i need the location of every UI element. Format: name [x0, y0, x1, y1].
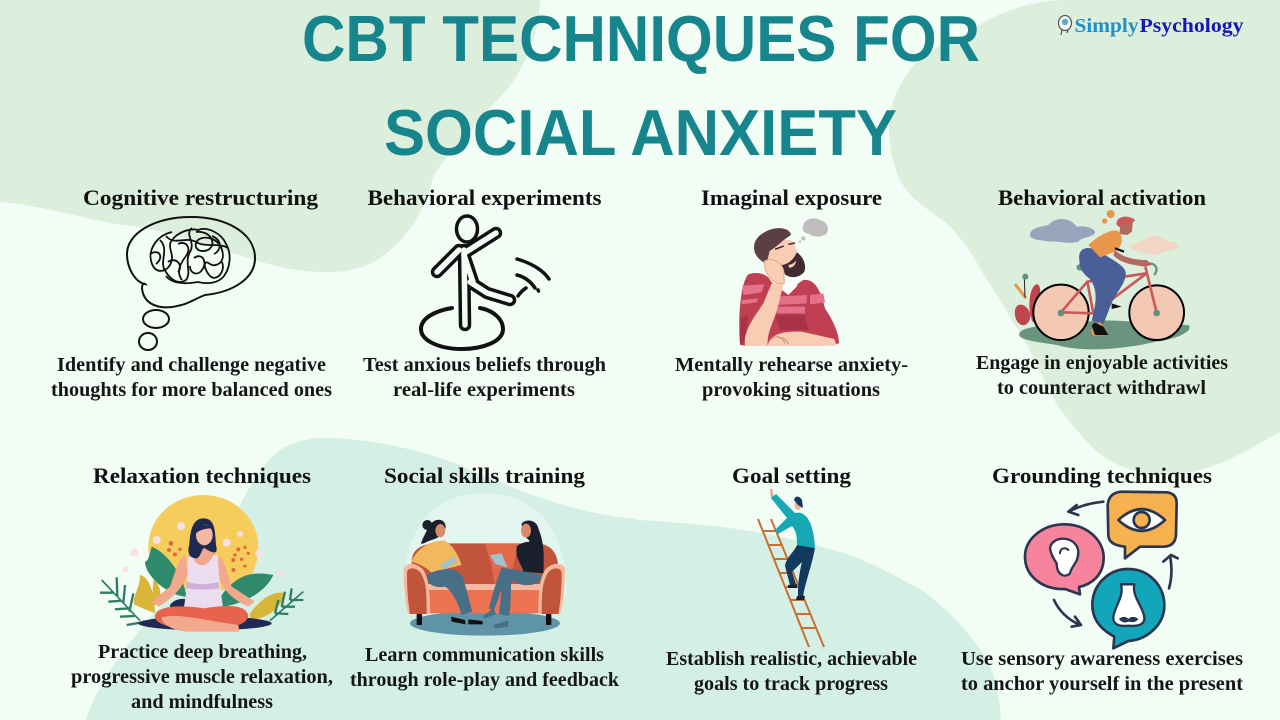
- description: relaxation techniques: progressive muscle relaxation,: [71, 667, 333, 688]
- description: relaxation techniques: [71, 642, 333, 713]
- heading: goal setting: Goal setting: [732, 463, 851, 488]
- heading: grounding techniques: Grounding techniques: [992, 463, 1212, 488]
- heading: behavioral activation: Behavioral activation: [998, 185, 1206, 210]
- description: grounding techniques: [961, 649, 1244, 695]
- background blob: top left: [0, 0, 540, 272]
- icon: cyclist on a bicycle: [1015, 210, 1190, 349]
- panel: behavioral activation: [976, 185, 1228, 399]
- icon: meditating woman with sun and leaves: [100, 495, 303, 632]
- description: imaginal exposure: provoking situations: [702, 380, 880, 401]
- heading: social skills training: Social skills training: [384, 463, 585, 488]
- panel: goal setting: [666, 463, 917, 695]
- icon: two women talking on a sofa: [403, 493, 567, 636]
- description: grounding techniques: to anchor yourself in the present: [961, 674, 1244, 695]
- description: imaginal exposure: Mentally rehearse anxiety-: [675, 355, 908, 376]
- description: cognitive restructuring: thoughts for more balanced ones: [51, 380, 332, 401]
- icon: person climbing a ladder: [758, 489, 824, 647]
- background blob: bottom: [86, 438, 1001, 720]
- logo: Simply Psychology: Simply: [1074, 15, 1138, 37]
- description: relaxation techniques: Practice deep breathing,: [98, 642, 307, 663]
- description: grounding techniques: Use sensory awareness exercises: [961, 649, 1243, 670]
- description: social skills training: Learn communication skills: [365, 645, 604, 666]
- icon: speech bubbles with eye, ear and nose: [1025, 492, 1178, 648]
- panel: grounding techniques: [961, 463, 1244, 695]
- description: goal setting: [666, 649, 917, 695]
- description: imaginal exposure: [675, 355, 908, 401]
- description: goal setting: Establish realistic, achievable: [666, 649, 917, 670]
- heading: cognitive restructuring: Cognitive restructuring: [83, 185, 318, 210]
- description: behavioral experiments: [363, 355, 606, 401]
- panel: imaginal exposure: [675, 185, 908, 401]
- description: behavioral experiments: real-life experiments: [393, 380, 575, 401]
- title: SOCIAL ANXIETY: [384, 96, 897, 169]
- logo: Simply Psychology: [1058, 15, 1244, 37]
- heading: behavioral experiments: Behavioral experiments: [368, 185, 602, 210]
- description: behavioral activation: [976, 353, 1228, 399]
- description: cognitive restructuring: Identify and challenge negative: [57, 355, 326, 376]
- description: social skills training: [350, 645, 619, 691]
- background blob: right: [889, 0, 1280, 475]
- icon: thought bubble with tangled scribble: [127, 217, 255, 350]
- panel: behavioral experiments: [363, 185, 606, 401]
- heading: imaginal exposure: Imaginal exposure: [701, 185, 882, 210]
- icon: bearded man thinking: [739, 218, 839, 346]
- title: CBT TECHNIQUES FOR: [302, 2, 980, 75]
- panel: social skills training: [350, 463, 619, 691]
- heading: relaxation techniques: Relaxation techniques: [93, 463, 311, 488]
- description: behavioral experiments: Test anxious beliefs through: [363, 355, 606, 376]
- description: behavioral activation: Engage in enjoyable activities: [976, 353, 1228, 374]
- logo: Simply Psychology: Psychology: [1140, 15, 1244, 37]
- icon: stick figure stepping off a disc: [421, 216, 549, 349]
- panel: relaxation techniques: [71, 463, 333, 713]
- description: relaxation techniques: and mindfulness: [131, 692, 273, 713]
- description: cognitive restructuring: [51, 355, 332, 401]
- panel: cognitive restructuring: [51, 185, 332, 401]
- title: [302, 2, 980, 169]
- description: goal setting: goals to track progress: [694, 674, 888, 695]
- description: behavioral activation: to counteract withdrawl: [997, 378, 1207, 399]
- description: social skills training: through role-play and feedback: [350, 670, 619, 691]
